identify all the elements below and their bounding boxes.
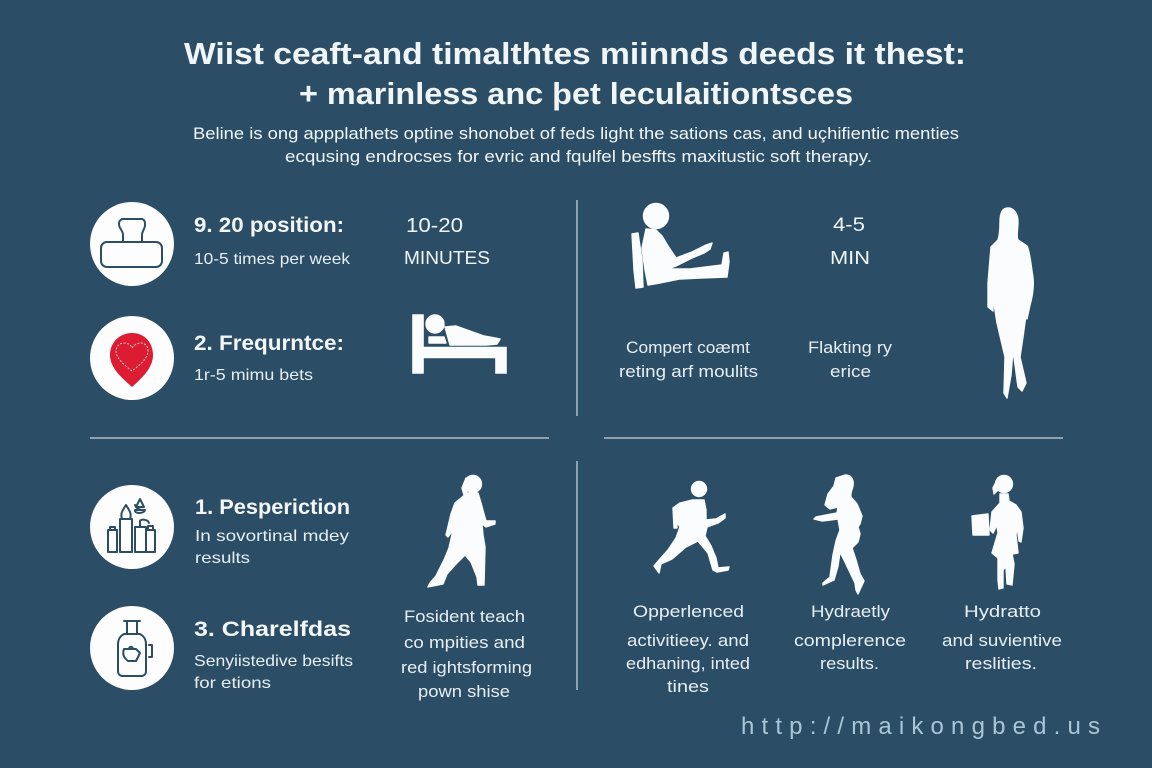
text: position: 9. 20 position: [194, 214, 344, 237]
text: hydraetly: complerence [794, 631, 906, 650]
text: charelfdas: for etions [194, 675, 271, 692]
text: opperlenced: edhaning, inted [626, 654, 750, 673]
icon: person in bed [412, 314, 506, 374]
text: position: 10-5 times per week [194, 251, 351, 268]
icon: heart pin [90, 316, 174, 400]
text: fosident: red ightsforming [401, 658, 532, 677]
text: flakting [808, 338, 893, 381]
text: fosident: pown shise [418, 682, 510, 701]
text: flakting: Flakting ry [808, 338, 893, 357]
panel: top left [90, 202, 506, 400]
text: hydraetly [794, 602, 906, 673]
text: hydratto: reslities. [965, 654, 1037, 673]
text: minutes: MINUTES [404, 248, 490, 268]
text: 4-5 min: MIN [830, 248, 870, 268]
text: hydratto [942, 602, 1062, 673]
text: pesperiction: 1. Pesperiction [195, 496, 350, 519]
text: charelfdas: Senyiistedive besifts [194, 653, 353, 670]
icon: figure with paper [972, 476, 1023, 589]
text: frequency [194, 332, 344, 384]
text: hydraetly: results. [820, 654, 879, 673]
panel: top right [619, 204, 1033, 398]
text: opperlenced: tines [667, 677, 709, 696]
icon: jar [90, 606, 174, 690]
text: flakting: erice [830, 362, 871, 381]
text: compert: reting arf moulits [619, 362, 758, 381]
panel: bottom left [90, 476, 532, 701]
icon: seated person [632, 204, 729, 288]
text: compert: Compert coæmt [626, 338, 750, 357]
text: 4-5 min [830, 215, 870, 268]
icon: bottles [90, 485, 174, 569]
title [184, 36, 966, 111]
watermark url: http://maikongbed.us [741, 713, 1100, 740]
text: minutes [404, 215, 490, 268]
title: Wiist ceaft-and timalthtes miinnds deeds it thest: [184, 36, 966, 71]
text: pesperiction [195, 496, 350, 567]
text: pesperiction: results [195, 550, 250, 567]
text: compert [619, 338, 758, 381]
panel: bottom right [626, 475, 1062, 696]
text: opperlenced: Opperlenced [633, 602, 744, 621]
icon: runner [654, 482, 729, 573]
subtitle [193, 124, 959, 166]
text: charelfdas [194, 618, 353, 692]
text: minutes: 10-20 [406, 215, 463, 237]
text: pesperiction: In sovortinal mdey [195, 528, 349, 545]
text: hydraetly: Hydraetly [811, 602, 891, 621]
text: opperlenced [626, 602, 750, 696]
text: position [194, 214, 351, 268]
text: opperlenced: activitieey. and [627, 631, 749, 650]
icon: walking figure [814, 475, 864, 594]
text: 4-5 min: 4-5 [833, 215, 865, 236]
text: hydratto: and suvientive [942, 631, 1062, 650]
text: fosident: co mpities and [404, 633, 525, 652]
text: frequency: 1r-5 mimu bets [194, 367, 313, 384]
text: charelfdas: 3. Charelfdas [194, 618, 351, 641]
text: frequency: 2. Frequrntce: [194, 332, 344, 355]
icon: standing woman [988, 208, 1033, 398]
text: fosident: Fosident teach [404, 607, 525, 626]
title: + marinless anc þet leculaitiontsces [299, 76, 853, 111]
icon: standing figure [428, 476, 495, 587]
subtitle: ecqusing endrocses for evric and fqulfel besffts maxitustic soft therapy. [285, 147, 872, 166]
text: hydratto: Hydratto [964, 602, 1041, 621]
dividers [90, 200, 1063, 690]
icon: pillow [90, 202, 174, 286]
text: fosident [401, 607, 532, 701]
subtitle: Beline is ong appplathets optine shonobet of feds light the sations cas, and uçhifientic menties [193, 124, 959, 143]
